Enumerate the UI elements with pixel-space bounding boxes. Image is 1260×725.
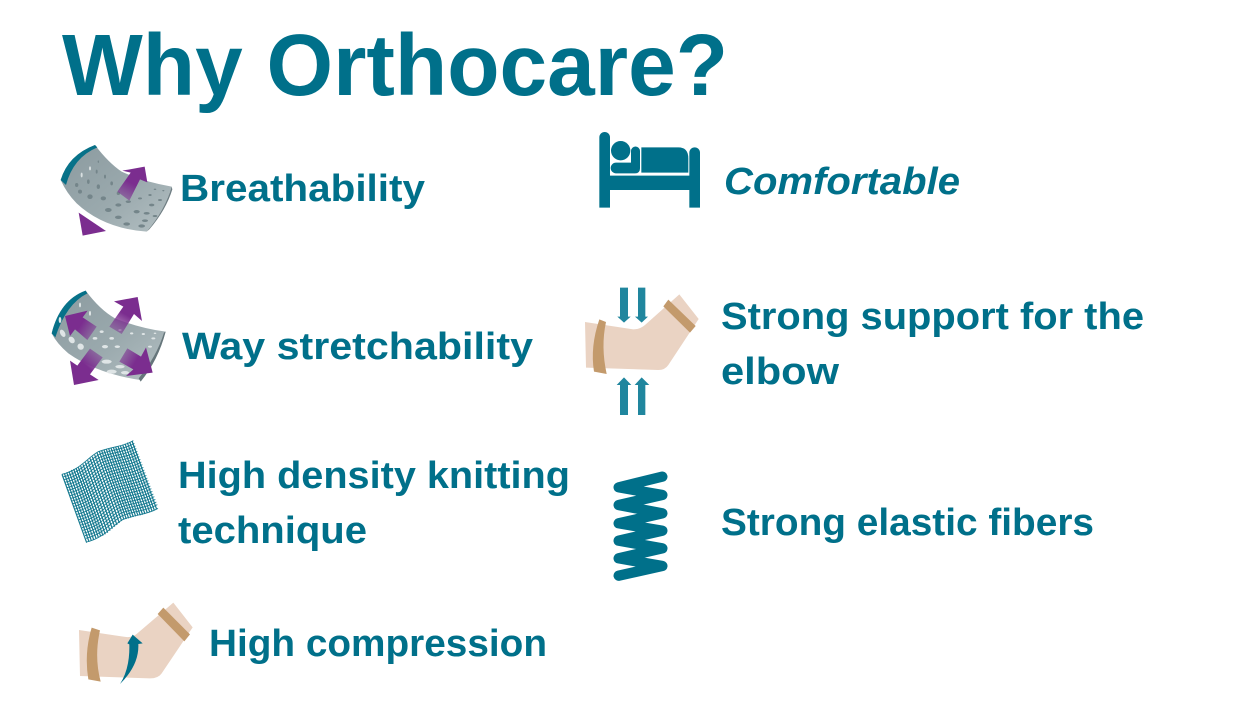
title: Why Orthocare? (62, 17, 728, 114)
text: High compression: High compression (209, 623, 547, 665)
icon: stretchable fabric (52, 291, 166, 385)
text: Breathability: Breathability (180, 168, 425, 210)
icon: elbow sleeve with arrow (79, 603, 193, 684)
text: technique: technique (178, 510, 367, 552)
text: High density knitting: High density knitting (178, 455, 570, 497)
text: Way stretchability: Way stretchability (182, 326, 533, 368)
icon: elbow sleeve with compression arrows (585, 288, 699, 415)
icon: breathable fabric (61, 145, 172, 236)
icon: spring (619, 477, 662, 576)
text: Strong elastic fibers: Strong elastic fibers (721, 502, 1094, 544)
text: elbow: elbow (721, 351, 839, 393)
icon: knitted mesh (62, 441, 158, 543)
text: Strong support for the: Strong support for the (721, 296, 1144, 338)
icon: person in bed (599, 132, 700, 208)
text: Comfortable: Comfortable (724, 161, 960, 203)
